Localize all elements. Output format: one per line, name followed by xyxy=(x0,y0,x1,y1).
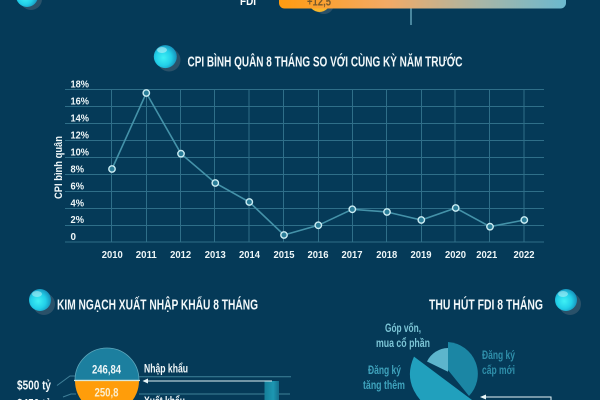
axis labels: percent: 6% xyxy=(70,180,85,192)
axis labels: percent: 18% xyxy=(70,78,90,90)
pie labels: Đăng ký xyxy=(482,348,515,362)
arrow xyxy=(480,394,551,400)
trade scale labels: $500 tỷ xyxy=(17,378,51,392)
axis labels: percent: 2% xyxy=(70,214,85,226)
axis labels: percent xyxy=(70,78,90,243)
heading: FDI: THU HÚT FDI 8 THÁNG xyxy=(429,296,543,314)
axis labels: years: 2012 xyxy=(170,249,191,261)
axis title: CPI bình quân xyxy=(53,136,65,199)
axis labels: years: 2015 xyxy=(274,249,295,261)
heading: FDI xyxy=(429,289,581,315)
axis labels: years: 2010 xyxy=(102,249,123,261)
trade circle: 250,8 xyxy=(94,386,119,400)
axis labels: years: 2019 xyxy=(410,249,432,261)
pie labels: mua cổ phần xyxy=(376,336,430,350)
import and export labels xyxy=(139,364,291,400)
axis labels: percent: 10% xyxy=(70,146,90,158)
data points xyxy=(109,90,528,238)
axis labels: percent: 14% xyxy=(70,112,90,124)
axis labels: years: 2020 xyxy=(445,249,466,261)
pie labels: tăng thêm xyxy=(363,378,405,392)
axis labels: years: 2016 xyxy=(308,249,329,261)
axis labels: years: 2022 xyxy=(514,249,535,261)
axis labels: percent: 16% xyxy=(70,95,90,107)
import and export labels: Nhập khẩu xyxy=(144,364,188,376)
pie labels: Góp vốn, xyxy=(385,321,421,335)
axis labels: years: 2021 xyxy=(476,249,497,261)
axis labels: percent: 0 xyxy=(70,231,76,243)
axis labels: percent: 12% xyxy=(70,129,90,141)
panel: trade chart xyxy=(17,348,291,400)
pie labels xyxy=(363,321,515,392)
pie labels: cấp mới xyxy=(482,363,515,377)
icon: top-left sphere xyxy=(16,0,42,10)
pie labels: Đăng ký xyxy=(368,363,401,377)
axis labels: years: 2011 xyxy=(136,249,157,261)
axis labels: years: 2018 xyxy=(376,249,397,261)
heading: trade: KIM NGẠCH XUẤT NHẬP KHẨU 8 THÁNG xyxy=(57,296,258,314)
heading: CPI: CPI BÌNH QUÂN 8 THÁNG SO VỚI CÙNG KỲ NĂM TRƯỚC xyxy=(188,52,463,70)
axis labels: percent: 4% xyxy=(70,197,85,209)
data line xyxy=(112,93,524,235)
FDI comparison bar xyxy=(240,0,566,25)
axis labels: years: 2017 xyxy=(342,249,363,261)
trade scale labels xyxy=(17,376,76,400)
column and pointer xyxy=(142,378,279,400)
trade circle xyxy=(74,348,140,400)
pie chart: FDI xyxy=(363,321,551,400)
axis labels: percent: 8% xyxy=(70,163,85,175)
axis labels: years xyxy=(102,249,535,261)
axis labels: years: 2014 xyxy=(239,249,260,261)
trade circle: 246,84 xyxy=(92,362,121,376)
axis labels: years: 2013 xyxy=(205,249,226,261)
heading: trade xyxy=(29,289,258,315)
heading: CPI xyxy=(154,45,463,72)
line chart: CPI xyxy=(53,78,544,261)
